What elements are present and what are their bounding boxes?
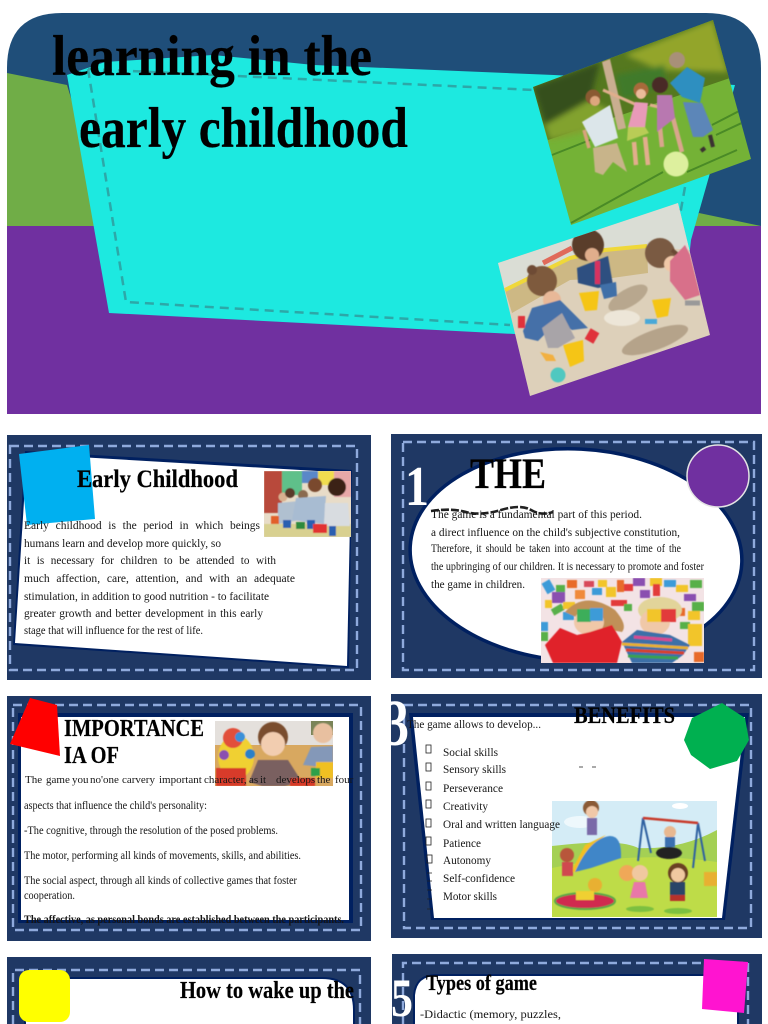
body text: character, [204,774,247,786]
body text: a direct influence on the child's subjective constitution, [431,525,680,539]
skills list: Sensory skills [443,762,506,776]
panel: importance [7,696,371,941]
panel: the game [391,434,762,678]
skills list: Perseverance [443,781,503,795]
photo: children in sandbox [498,203,710,396]
body text: as [249,774,258,786]
white trapezoid card [409,713,749,920]
skills list: Patience [443,836,481,850]
heading [64,716,204,769]
panel background [391,694,762,938]
body text: four [335,774,354,786]
magenta shape [702,959,748,1013]
panel background [7,696,371,941]
body text: you [72,774,89,786]
dashed border [10,446,357,670]
body text: The motor, performing all kinds of movements, skills, and abilities. [24,848,301,862]
title: early childhood [79,97,408,160]
body text: Early childhood is the period in which beings [24,518,260,532]
dashed border [403,442,754,670]
body text: the upbringing of our children. It is necessary to promote and foster [431,559,704,573]
body text: develops [276,774,315,786]
body text: game [46,774,70,786]
dashed border [13,970,360,1024]
photo: babies with toys [215,721,333,786]
heading: IMPORTANCE [64,716,204,742]
purple circle [687,445,749,507]
body text: -Didactic (memory, puzzles, [420,1007,561,1021]
body text: The [25,774,42,786]
body text: The game is a fundamental part of this period. [431,507,642,521]
heading: BENEFITS [574,703,675,728]
body text: important [159,774,202,786]
white ellipse [405,440,747,670]
skills list: Autonomy [443,853,491,867]
body text: aspects that influence the child's personality: [24,798,207,812]
panel background [392,954,762,1024]
body text: the [317,774,331,786]
body text: greater growth and better development in this early [24,606,263,620]
body text: The affective, as personal bonds are established between the participants. [24,912,344,926]
white card [25,978,354,1024]
panel background [7,435,371,680]
hero background [7,13,761,414]
panel background [7,957,371,1024]
yellow rounded shape [19,970,70,1022]
white card [13,451,352,668]
photo: children playing ball in park [533,20,751,225]
red shape [10,698,60,756]
cyan note card [67,55,735,340]
number 1: 1 [405,456,429,518]
title: learning in the [52,25,372,88]
skills list: Self-confidence [443,871,515,885]
white card [18,713,353,923]
skills list: Social skills [443,745,498,759]
dashed border [403,963,748,1024]
body text: it is necessary for children to be attended to with [24,553,276,567]
heading: THE [470,451,546,498]
body text: the game in children. [431,577,525,591]
body text: no'one [90,774,119,786]
illustration: playground [552,800,717,917]
photo: classroom [264,471,351,537]
skills list [426,745,560,909]
body text: stimulation, in addition to good nutrition - to facilitate [24,589,269,603]
skills list: Oral and written language [443,817,560,831]
dashed border [13,705,361,930]
body text: Therefore, it should be taken into account at the time of the [431,541,681,555]
green octagon [684,703,749,769]
number 3: 3 [384,687,409,760]
hero panel [7,10,761,414]
overlapping hidden heading strokes [431,507,553,514]
body text: much affection, care, attention, and with an adequate [24,571,295,585]
body text [24,518,295,637]
title [52,25,408,160]
body text: it [260,774,266,786]
heading: Types of game [426,970,537,995]
panel: how to wake up [7,957,371,1024]
heading: Early Childhood [77,466,238,493]
panel: types of game [391,954,762,1024]
intro text: The game allows to develop... [407,717,541,731]
heading: IA OF [64,743,119,769]
skills list: Creativity [443,799,488,813]
body text [431,507,704,591]
panel: early childhood [7,435,371,680]
body text: humans learn and develop more quickly, so [24,536,221,550]
panel: benefits [384,687,762,938]
blue square [19,445,95,525]
skills list: Motor skills [443,889,497,903]
panel background [391,434,762,678]
body text: carvery [122,774,155,786]
body text: The social aspect, through all kinds of collective games that foster [24,873,297,887]
heading: How to wake up the [180,978,354,1004]
body text: -The cognitive, through the resolution of the posed problems. [24,823,278,837]
body text: cooperation. [24,888,75,902]
stray dashes [579,766,596,768]
body text [24,774,354,926]
photo: children with blocks [541,578,704,663]
body text: stage that will influence for the rest of life. [24,623,203,637]
dashed border [404,705,751,928]
white card [414,975,738,1024]
